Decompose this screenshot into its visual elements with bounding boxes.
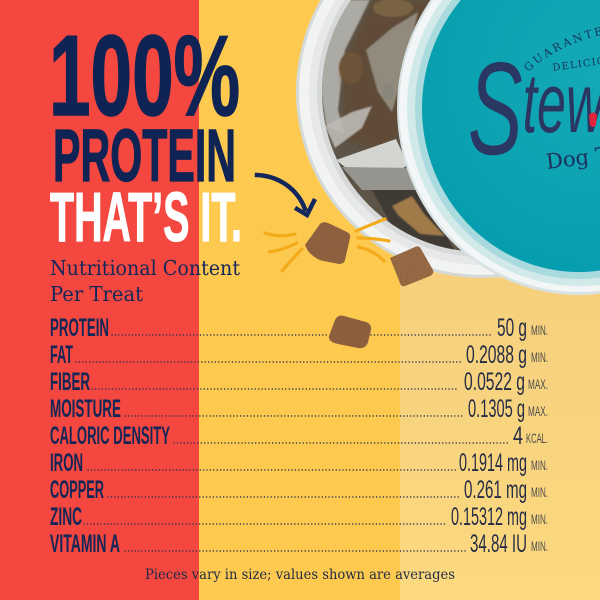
row: moisture: 0.1305 g <box>468 395 525 423</box>
row: iron: IRON <box>50 449 83 477</box>
row: copper: 0.261 mg <box>464 476 527 504</box>
row: vitamin a: MIN. <box>531 538 548 554</box>
row: iron <box>50 449 548 477</box>
footnote: Pieces vary in size; values shown are averages <box>145 567 455 583</box>
background: red band <box>0 0 199 600</box>
impact lines <box>265 219 389 271</box>
row: copper: MIN. <box>531 484 548 500</box>
row: iron: 0.1914 mg <box>459 449 527 477</box>
row: zinc: MIN. <box>531 511 548 527</box>
treat 1 <box>305 222 350 264</box>
row: moisture <box>50 395 548 423</box>
row: zinc <box>50 503 548 531</box>
row: moisture: MOISTURE <box>50 395 121 423</box>
row: caloric density <box>50 422 548 450</box>
lid logo: brand name: S <box>468 36 523 183</box>
row: fat: MIN. <box>531 349 548 365</box>
row: fiber: FIBER <box>50 368 90 396</box>
icon: hand-drawn arrow <box>257 175 314 215</box>
row: vitamin a: 34.84 IU <box>470 530 527 558</box>
row: fiber: MAX. <box>528 376 548 392</box>
row: copper: COPPER <box>50 476 104 504</box>
subtitle: per treat: Per Treat <box>50 282 144 306</box>
row: protein: MIN. <box>531 322 548 338</box>
row: protein <box>50 314 548 342</box>
row: zinc: ZINC <box>50 503 82 531</box>
lid of the tub <box>397 0 600 295</box>
row: caloric density: 4 <box>513 422 523 450</box>
row: copper <box>50 476 548 504</box>
row: vitamin a <box>50 530 548 558</box>
row: fat: FAT <box>50 341 73 369</box>
row: protein: PROTEIN <box>50 314 109 342</box>
row: protein: 50 g <box>497 314 527 342</box>
row: fat <box>50 341 548 369</box>
row: vitamin a: VITAMIN A <box>50 530 120 558</box>
row: fat: 0.2088 g <box>466 341 527 369</box>
title: that's it: THAT’S IT. <box>50 178 242 256</box>
row: iron: MIN. <box>531 457 548 473</box>
treat 3 <box>329 316 371 348</box>
row: zinc: 0.15312 mg <box>451 503 527 531</box>
open tub with treats <box>296 0 501 278</box>
subtitle: nutritional content: Nutritional Content <box>50 256 241 280</box>
treat 2 <box>390 246 433 286</box>
title: protein: PROTEIN <box>53 114 236 197</box>
background: yellow band <box>199 0 400 600</box>
row: fiber <box>50 368 548 396</box>
lid logo: tongue <box>589 112 597 127</box>
row: caloric density: CALORIC DENSITY <box>50 422 170 450</box>
row: caloric density: KCAL. <box>526 430 548 446</box>
title: 100%: 100% <box>49 13 240 140</box>
row: moisture: MAX. <box>528 403 548 419</box>
background: pale yellow band <box>400 0 600 600</box>
row: fiber: 0.0522 g <box>464 368 525 396</box>
